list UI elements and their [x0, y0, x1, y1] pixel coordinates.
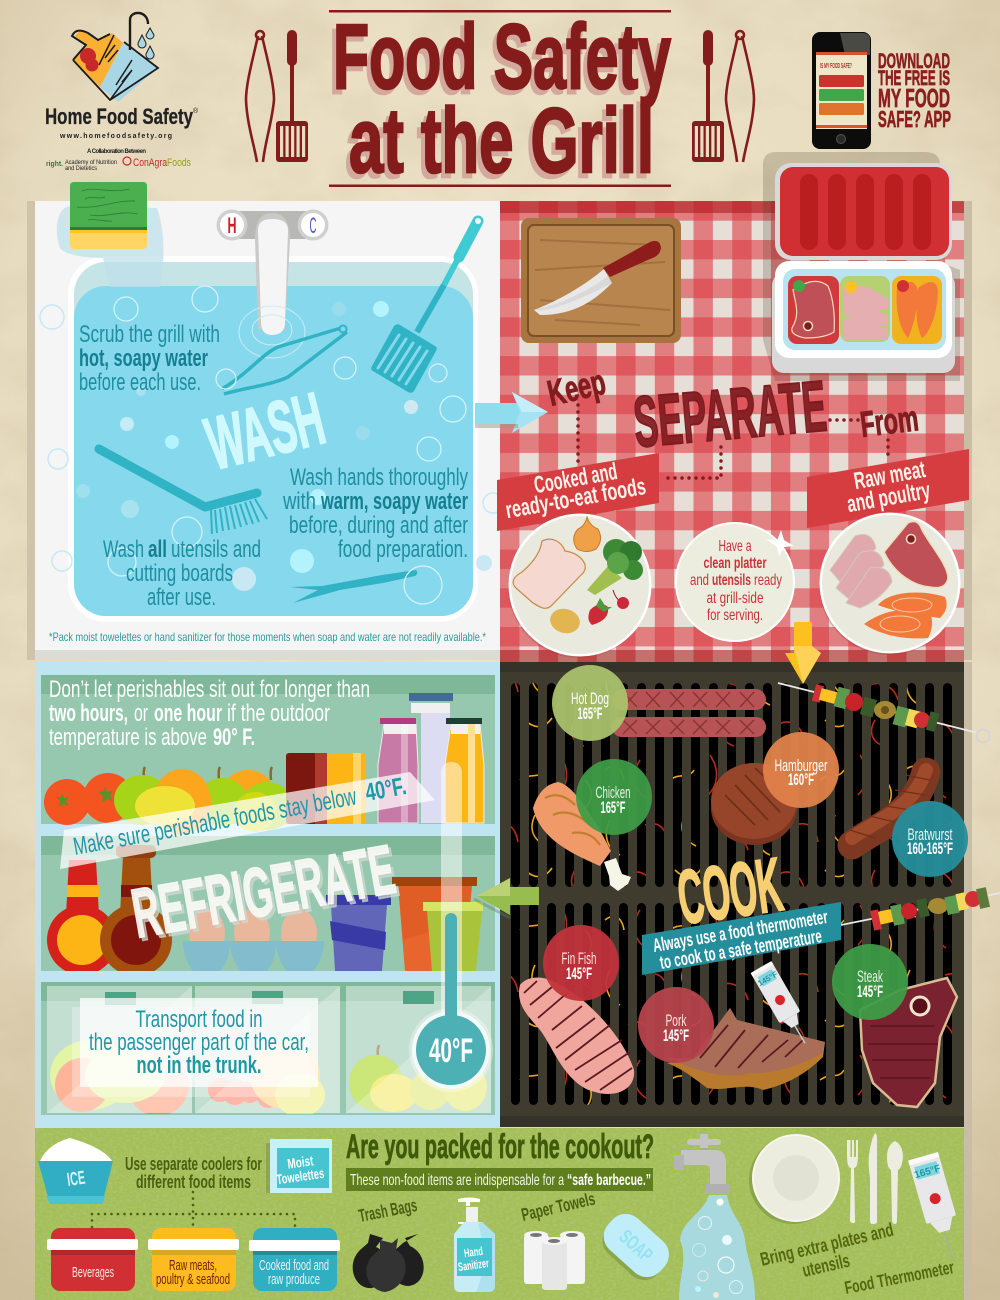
- icon: right tongs: [726, 31, 754, 162]
- icon: hand sanitizer: Sanitizer: [457, 1256, 490, 1274]
- cooler with meat trays: [772, 261, 955, 373]
- icon: sponge: [70, 182, 147, 249]
- icon: ice bowl: ICE: [66, 1168, 87, 1191]
- shelf 2 containers: [326, 877, 483, 971]
- cooler shadow: [763, 152, 960, 381]
- text: wash utensils: cutting boards: [126, 560, 233, 587]
- icon: plate: [749, 1134, 840, 1224]
- banner: thermometer advice: to cook to a safe temperature: [658, 926, 824, 974]
- title shadow: at the Grill: [345, 95, 650, 197]
- title rule top: [329, 10, 671, 12]
- cooler: raw meats: Raw meats,: [169, 1257, 217, 1274]
- coals: [511, 683, 952, 1105]
- temp: fin fish: [543, 925, 619, 1001]
- icon: food thermometer: 165°F: [913, 1163, 942, 1181]
- text: perishables: temperature is above: [49, 724, 207, 751]
- sink: [68, 256, 478, 622]
- text: wash hands: [282, 464, 468, 563]
- food: t-bone steak: [860, 978, 957, 1107]
- panel: wash: [27, 182, 503, 660]
- food: lower kebab: [841, 887, 1000, 931]
- icon: left tongs: [246, 31, 274, 162]
- transport note box: Transport food in: [136, 1006, 262, 1033]
- temp: hot dog: 165°F: [578, 704, 602, 723]
- partner: Academy of Nutrition and Dietetics: right.: [46, 161, 63, 168]
- panel: packed for the cookout: [35, 1128, 972, 1300]
- food: burger patty: [711, 763, 797, 845]
- text: perishables: Don’t let perishables sit out for longer than: [49, 676, 370, 703]
- panel: cook: COOK: [673, 842, 787, 941]
- banner: perishable foods: 40°F.: [363, 772, 408, 807]
- icon: spoon: [887, 1141, 903, 1224]
- download text: MY FOOD: [878, 83, 950, 113]
- icon: cutting board and sink: [72, 13, 158, 102]
- text: wash hands: food preparation.: [338, 536, 468, 563]
- thermometer: 40F: 40°F: [429, 1032, 473, 1070]
- panel: separate: [475, 152, 972, 662]
- text: separate coolers: Use separate coolers for: [125, 1154, 262, 1174]
- shelf 2 eggs: [183, 909, 324, 975]
- bottom panel shadow: [964, 1128, 972, 1300]
- transport note box: the passenger part of the car,: [89, 1029, 309, 1056]
- tablecloth bottom band: [500, 650, 964, 662]
- subheading banner: [346, 1168, 653, 1191]
- temp: pork: 145°F: [663, 1026, 689, 1045]
- icon: soap: SOAP: [615, 1226, 657, 1267]
- label: extra plates: [758, 1220, 896, 1282]
- temp: hamburger: [763, 732, 839, 808]
- banner: raw meat: Raw meat: [852, 456, 927, 495]
- banner: thermometer advice: Always use a food thermometer: [651, 907, 830, 957]
- platter text: and: [690, 572, 709, 589]
- panel: refrigerate: [35, 662, 500, 1128]
- arrow: separate to cook: [785, 622, 821, 684]
- running water: [679, 1195, 755, 1300]
- food: bratwurst: [850, 770, 930, 845]
- tray bone: [804, 322, 812, 330]
- icon: potato: [547, 606, 583, 636]
- subheading banner: These non-food items are indispensable for a: [350, 1172, 564, 1189]
- icon: faucet: [674, 1134, 729, 1194]
- banner: raw meat: and poultry: [845, 477, 933, 518]
- icon: wash tongs: [222, 328, 347, 394]
- temp: bratwurst: [892, 801, 968, 877]
- banner: raw meat: [807, 449, 969, 528]
- grill bottom rim: [500, 1116, 964, 1127]
- icon: left spatula: [276, 30, 308, 162]
- temp: chicken: Chicken: [596, 783, 630, 802]
- text: Keep: Keep: [544, 361, 609, 414]
- banner: cooked foods: Cooked and: [532, 458, 619, 499]
- text: perishables: [49, 676, 370, 751]
- text: wash hands: warm, soapy water: [320, 488, 468, 515]
- cooler: beverages: Beverages: [72, 1264, 114, 1281]
- food: chicken drumstick: [533, 782, 631, 891]
- text: scrub the grill: Scrub the grill with: [79, 321, 220, 348]
- text: wash hands: with: [282, 488, 316, 515]
- steak bone: [906, 534, 916, 544]
- drawers: [47, 986, 491, 1117]
- plate: raw meat: [819, 512, 960, 655]
- phone app promo: [812, 32, 951, 149]
- cooler lid: [775, 163, 952, 260]
- icon: moist towelettes: Moist: [286, 1152, 315, 1172]
- temp: hamburger: 160°F: [788, 770, 814, 789]
- text: separate coolers: [125, 1154, 262, 1192]
- icon: smartphone: IS MY FOOD SAFE?: [820, 63, 852, 70]
- label: extra plates: Bring extra plates and: [758, 1220, 896, 1271]
- icon: wash tongs pivot: [340, 326, 346, 332]
- arrow: cook to refrigerate: [474, 878, 539, 918]
- text: From: From: [858, 397, 921, 445]
- text: separate coolers: different food items: [136, 1172, 251, 1192]
- banner: perishable foods: Make sure perishable foods stay below: [71, 782, 359, 861]
- faucet handles: [216, 210, 328, 240]
- title shadow: [329, 11, 667, 197]
- sponge splash: [57, 206, 163, 287]
- drawer handles: [105, 991, 434, 1005]
- raw salmon: [864, 592, 947, 638]
- shelf 1: [41, 675, 495, 824]
- shelf 1 produce: [44, 767, 293, 835]
- partner: ConAgra Foods: ConAgra: [133, 157, 168, 169]
- cooler: cooked food: Cooked food and: [259, 1257, 329, 1274]
- heading: WASH: WASH: [198, 376, 332, 486]
- table shadow: [964, 201, 972, 660]
- icon: knife: [534, 241, 661, 315]
- grill slots: [511, 683, 952, 1105]
- raw poultry: [830, 534, 892, 608]
- cutting board: [521, 218, 681, 343]
- registered mark: ®: [193, 107, 199, 115]
- title shadow: Food Safety: [329, 11, 667, 113]
- temp: steak: Steak: [857, 967, 883, 986]
- cooler: beverages: [47, 1228, 138, 1291]
- icon: strawberry leaves: [596, 598, 612, 612]
- temp: fin fish: Fin Fish: [562, 949, 596, 968]
- icon: knife: [869, 1133, 877, 1224]
- icon: cherry: [613, 590, 629, 609]
- icon: ice bowl: [38, 1138, 113, 1204]
- temp: chicken: 165°F: [600, 798, 626, 817]
- icon: hand sanitizer: Hand: [463, 1244, 484, 1260]
- food: top kebab: [778, 683, 990, 742]
- text: perishables: if the outdoor: [227, 700, 330, 727]
- transport note box: not in the trunk.: [136, 1052, 262, 1079]
- food: hot dogs: [612, 689, 766, 737]
- icon: moist towelettes: [266, 1139, 332, 1193]
- platter text: clean platter: [704, 555, 766, 572]
- icon: right spatula: [692, 30, 724, 162]
- icon: broccoli: [587, 539, 643, 595]
- grill background: [500, 662, 964, 1127]
- logo wordmark: Home Food Safety: [45, 104, 194, 129]
- gingham tablecloth: [500, 201, 964, 662]
- grass texture: [35, 1128, 964, 1300]
- shelf 2: [41, 836, 495, 971]
- tray labels: [793, 280, 909, 293]
- counter edge: [35, 650, 500, 660]
- dotted cooler connectors: [92, 1192, 295, 1227]
- wash panel background: [35, 201, 500, 660]
- shelf 2 condiments: [47, 845, 172, 976]
- label: paper towels: Paper Towels: [519, 1189, 597, 1225]
- title block: [329, 6, 671, 197]
- platter text: [690, 538, 782, 624]
- grass background: [35, 1128, 964, 1300]
- platter text: at grill-side: [706, 590, 764, 607]
- text: wash utensils: all: [148, 536, 167, 563]
- heading: packed: Are you packed for the cookout?: [346, 1128, 654, 1166]
- temp: pork: Pork: [666, 1011, 687, 1030]
- text: wash hands: before, during and after: [289, 512, 468, 539]
- label: extra plates: utensils: [800, 1251, 852, 1282]
- food: pork chop: [667, 1008, 825, 1090]
- text: wash utensils: after use.: [147, 584, 216, 611]
- cooler: raw meats: poultry & seafood: [156, 1271, 230, 1288]
- text: perishables: 90° F.: [213, 724, 255, 751]
- tool: probe thermometer: 145°F: [756, 969, 779, 988]
- icon: fork: [847, 1140, 858, 1223]
- text: wash utensils: utensils and: [171, 536, 261, 563]
- banner: cooked foods: [497, 453, 659, 531]
- cooler: raw meats: [148, 1228, 239, 1291]
- text: scrub the grill: hot, soapy water: [79, 345, 208, 372]
- cooler: cooked food: [249, 1228, 340, 1291]
- platter text: for serving.: [707, 607, 763, 624]
- temp: hot dog: Hot Dog: [571, 689, 609, 708]
- heading: REFRIGERATE: REFRIGERATE: [126, 830, 401, 953]
- tablecloth top band: [500, 201, 964, 213]
- text: wash utensils: Wash: [103, 536, 144, 563]
- banner: perishable foods: [60, 772, 435, 869]
- temp: pork: [638, 987, 714, 1063]
- banner: cooked foods: ready-to-eat foods: [503, 473, 648, 524]
- drawer produce: [50, 1040, 487, 1117]
- temp: hamburger: Hamburger: [774, 756, 828, 775]
- grill side shadow: [964, 662, 972, 1128]
- platter text: utensils: [712, 572, 751, 589]
- tray salmon: [897, 282, 938, 338]
- faucet handles: C: [310, 213, 317, 238]
- partner: ConAgra Foods: Foods: [167, 157, 191, 169]
- title text: at the Grill: [349, 90, 654, 192]
- icon: carving fork: [290, 570, 417, 603]
- partner: Academy of Nutrition and Dietetics: Academy of Nutrition: [65, 159, 117, 166]
- icon: moist towelettes: Towelettes: [275, 1165, 325, 1187]
- icon: wash spatula: [371, 218, 481, 393]
- download text: [878, 50, 951, 132]
- icon: strawberry: [588, 604, 608, 625]
- shelf 3: [41, 982, 495, 1115]
- dotted connectors: [578, 405, 888, 478]
- icon: onion: [574, 517, 601, 552]
- tray steak: [792, 281, 834, 338]
- thermometer: 40F: [409, 762, 493, 1092]
- raw steak: [884, 522, 948, 588]
- text: perishables: one hour: [154, 700, 222, 727]
- wash panel side shadow: [27, 201, 35, 660]
- drawer fronts: [47, 986, 491, 1113]
- title text: [333, 6, 671, 192]
- temp: hot dog: [552, 665, 628, 741]
- cooler: cooked food: raw produce: [268, 1271, 320, 1288]
- platter text: Have a: [718, 538, 752, 555]
- partner: Academy of Nutrition and Dietetics: and Dietetics: [65, 165, 98, 172]
- bubbles: [40, 286, 503, 604]
- food: fin fish: [519, 978, 634, 1094]
- subheading banner: “safe barbecue.”: [567, 1172, 651, 1189]
- platter text: ready: [754, 572, 782, 589]
- title rule bottom: [329, 184, 671, 187]
- arrow: wash to separate: [475, 392, 548, 433]
- transport note box: [72, 998, 318, 1097]
- footnote: *Pack moist towelettes or hand sanitizer for those moments when soap and water are not readily available.*: [49, 630, 486, 644]
- grill top rim: [500, 662, 964, 672]
- tool: probe thermometer: [751, 961, 815, 1049]
- text: wash utensils: [103, 536, 261, 611]
- title text: Food Safety: [333, 6, 671, 108]
- faucet handles: H: [228, 213, 236, 238]
- partner: ConAgra Foods: [123, 157, 191, 169]
- shelf 1 juice boxes: [286, 753, 366, 824]
- partner: Academy of Nutrition and Dietetics: [46, 159, 117, 172]
- text: perishables: two hours,: [49, 700, 128, 727]
- collaboration line: A Collaboration Between: [87, 149, 146, 155]
- text: perishables: or: [134, 700, 148, 727]
- plate: clean platter: [675, 522, 795, 642]
- temp: chicken: [576, 759, 652, 835]
- temp: bratwurst: Bratwurst: [908, 825, 953, 844]
- icon: bread: [513, 539, 585, 608]
- label: trash bags: Trash Bags: [357, 1195, 419, 1226]
- text: scrub the grill: [79, 321, 220, 396]
- temp: steak: [832, 944, 908, 1020]
- icon: scrub brush: [99, 449, 267, 534]
- icon: hand sanitizer: [454, 1198, 495, 1292]
- fridge background: [35, 662, 500, 1128]
- tray chicken: [844, 286, 889, 340]
- temp: fin fish: 145°F: [566, 964, 592, 983]
- logo: Home Food Safety: [45, 13, 199, 172]
- shelf 1 bottles: [378, 693, 484, 823]
- icon: trash bags: [353, 1234, 424, 1292]
- plate: cooked foods: [508, 514, 652, 658]
- panel: cook: [474, 622, 1000, 1128]
- website: www.homefoodsafety.org: [59, 133, 172, 140]
- icon: soap: [594, 1206, 676, 1288]
- faucet spout: [239, 213, 305, 358]
- heading: REFRIGERATE: [126, 830, 404, 956]
- temp: steak: 145°F: [857, 982, 883, 1001]
- text: scrub the grill: before each use.: [79, 369, 201, 396]
- temp: bratwurst: 160-165°F: [907, 839, 953, 858]
- icon: paper towels: [524, 1231, 585, 1290]
- text: wash hands: Wash hands thoroughly: [290, 464, 468, 491]
- sparkle: [766, 530, 794, 556]
- banner: thermometer advice: [642, 902, 841, 975]
- icon: food thermometer: [908, 1152, 967, 1263]
- heading: REFRIGERATE: REFRIGERATE: [129, 833, 404, 956]
